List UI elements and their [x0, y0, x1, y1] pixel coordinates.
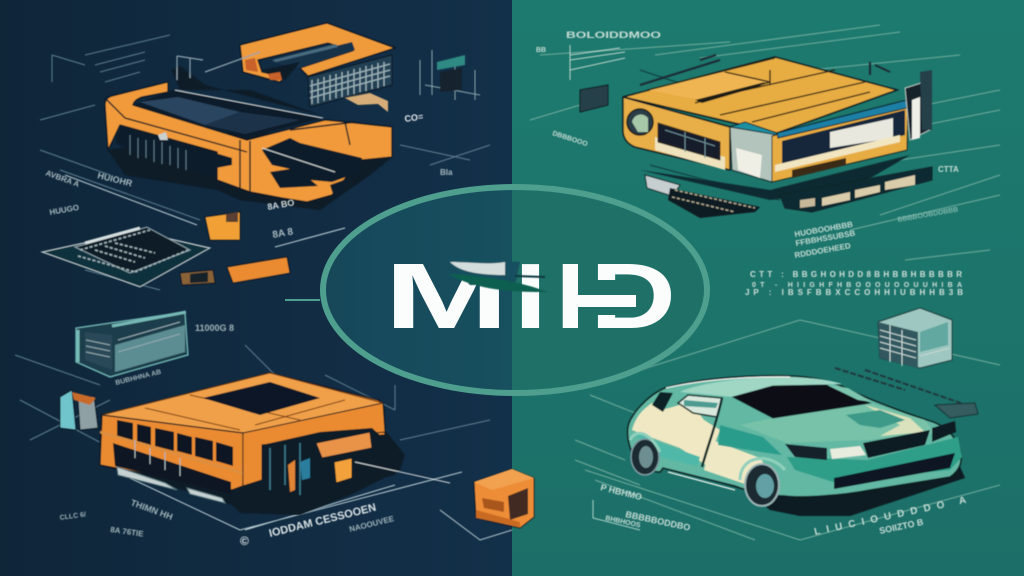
pseudo labels: lower-left text: IODDAM CESSOOEN: [268, 502, 378, 540]
pseudo labels: upper-right text: DBBBOOO: [551, 130, 589, 148]
grille: [863, 430, 930, 458]
logo: MIHD wordmark: D: [590, 244, 676, 348]
pseudo labels: upper-right text: [536, 30, 959, 260]
machine: lower-left isometric orange unit: [60, 373, 450, 515]
rear window: [652, 392, 673, 412]
pseudo labels: lower-left text: [59, 323, 396, 548]
pseudo labels: upper-right text: BOLOIDDMOO: [566, 30, 661, 40]
pseudo labels: lower-left text: BUBHHNA AB: [115, 369, 162, 387]
connector: rail behind car: [835, 368, 978, 418]
pseudo labels: below-car text: [600, 482, 967, 538]
logo: MIHD wordmark: H: [553, 244, 658, 348]
door pillar: [702, 398, 722, 467]
car shadow: [655, 462, 965, 516]
car body: [628, 376, 961, 497]
icon: orange crate: [474, 469, 534, 528]
hood: [740, 403, 935, 443]
logo: MIHD wordmark: M: [384, 244, 509, 348]
detail: gear cluster upper right of left panel: [420, 50, 480, 100]
connector: dark strip: [645, 175, 760, 218]
pseudo labels: upper-right text: FFBBHSSUBSB: [795, 229, 856, 248]
pseudo labels: lower-left text: THIMN HH: [129, 497, 174, 522]
data text block: right side: [745, 270, 963, 297]
door cream panel: [704, 440, 768, 484]
pseudo labels: lower-left text: 11000G 8: [195, 323, 234, 333]
pseudo labels: upper-left text: BIa: [440, 168, 453, 177]
panel: left navy background: [0, 0, 512, 576]
pseudo labels: upper-left text: HUIOHR: [97, 170, 134, 189]
side window: [678, 395, 722, 417]
pseudo labels: upper-left text: 8A 8: [272, 226, 294, 241]
detached top housing: [240, 23, 395, 107]
machine front opening: [116, 125, 232, 178]
pseudo labels: upper-left text: 8A BO: [267, 197, 295, 212]
screen module: lower-left monitor: [76, 312, 188, 377]
headlights: [785, 444, 827, 460]
machine: upper-left isometric orange unit: [105, 23, 395, 210]
pseudo labels: upper-right text: BB: [536, 47, 546, 54]
pseudo labels: upper-right text: RDDDOEHEED: [794, 241, 852, 260]
pseudo labels: upper-left text: HUUGO: [49, 203, 80, 217]
icon: small server cube: [878, 308, 952, 368]
pseudo labels: below-car text: SOIIZTO B: [878, 517, 925, 536]
swoosh over logo: [445, 258, 548, 292]
emblem: central circle: [285, 185, 710, 395]
roof: [680, 377, 842, 397]
pseudo labels: upper-left text: [44, 111, 453, 241]
data text block: right side: JP : IBSFBBXCCOHHIUBHHB3B: [745, 288, 963, 297]
icon: orange parts: [180, 257, 290, 285]
pseudo labels: below-car text: P HBHMO: [600, 482, 643, 502]
panel: right teal background: [512, 0, 1024, 576]
rear cream panel: [632, 402, 720, 465]
logo: MIHD wordmark: I: [514, 244, 547, 348]
pseudo labels: upper-left text: CO=: [404, 111, 424, 124]
icon: small orange block: [205, 212, 240, 240]
machine: upper-right isometric yellow unit: [580, 55, 932, 200]
pseudo labels: lower-left text: NAOOUVEE: [348, 514, 396, 534]
lower intake: [834, 453, 955, 489]
pseudo labels: lower-left text: CLLC 6/: [59, 511, 87, 522]
pseudo labels: below-car text: BHBHOOS: [605, 515, 641, 529]
logo: MIHD wordmark: [394, 264, 671, 328]
pseudo labels: lower-left text: ©: [240, 534, 249, 548]
pseudo labels: lower-left text: 8A 76TIE: [110, 525, 145, 539]
windows rows: [113, 420, 233, 494]
front bumper: [787, 437, 962, 482]
battery strip: lower right of yellow unit: [780, 167, 932, 212]
pseudo labels: upper-right text: HUOBOOHBBB: [794, 220, 854, 239]
pseudo labels: upper-left text: AVBRA A: [44, 168, 81, 189]
main body: [108, 130, 392, 210]
pseudo labels: below-car text: BBBBBODDBO: [625, 509, 691, 533]
icon: keyboard module: [42, 227, 210, 287]
side stripes: [718, 425, 782, 455]
pseudo labels: below-car text: LIUCIOUDDDO A: [813, 495, 967, 538]
data text block: right side: CTT : BBGHOHDD8BHBBHBBBBR: [750, 270, 962, 279]
illustration: green and cream car: [628, 376, 965, 516]
data text block: right side: 0T - HIIGHFHBOOOUOOUUHIBA: [752, 282, 962, 289]
windshield: [733, 385, 870, 418]
wheels: [631, 439, 659, 475]
pseudo labels: upper-right text: BBBBOOBDDBBB: [897, 206, 959, 224]
pseudo labels: upper-right text: CTTA: [938, 165, 959, 174]
